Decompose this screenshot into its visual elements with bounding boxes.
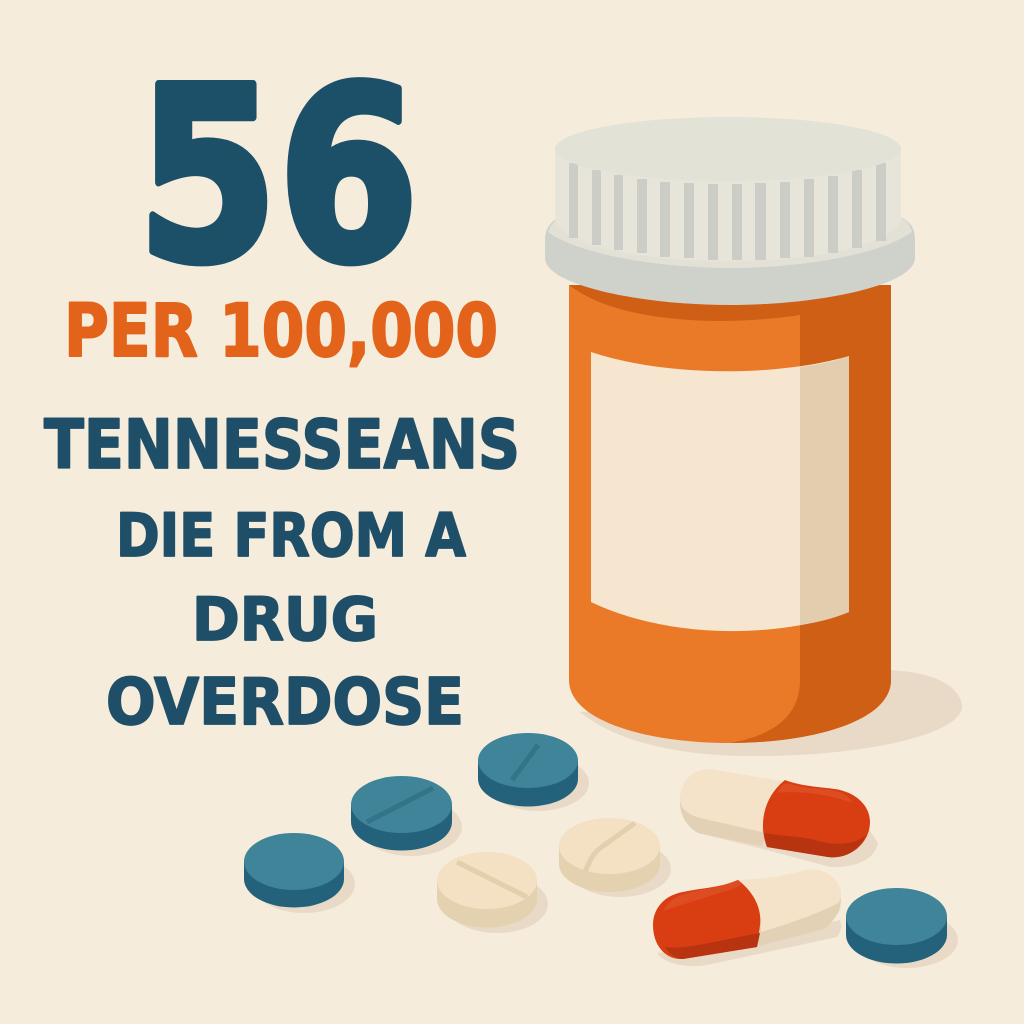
red half <box>653 880 760 959</box>
bottle neck shadow <box>569 285 891 321</box>
subheading: per 100,000: PER 100,000 <box>64 289 498 374</box>
icon: pill bottle <box>545 117 962 756</box>
cap ribbed side <box>555 148 901 261</box>
pill: cream lower <box>437 852 548 933</box>
pill: teal scored <box>351 776 462 856</box>
capsule shadow <box>698 825 878 867</box>
cream half <box>738 870 841 946</box>
capsule: cream and red upper <box>680 769 878 867</box>
bottle body <box>569 285 891 743</box>
label <box>591 352 849 631</box>
bottle shadow <box>580 670 962 756</box>
cap rim <box>545 217 915 305</box>
label shaded side <box>800 356 849 625</box>
pill: teal top <box>478 733 589 811</box>
cap ribs <box>569 163 886 260</box>
capsule shadow <box>657 920 841 966</box>
pill: cream upper <box>559 818 671 897</box>
text block: statement: OVERDOSE <box>106 666 464 740</box>
bottle shaded side <box>730 285 891 743</box>
text block: statement: TENNESSEANS <box>44 406 520 485</box>
big number: 56: 56 <box>137 36 419 316</box>
red half <box>763 780 870 857</box>
cap rim top surface <box>548 217 912 268</box>
text block: statement: DIE FROM A <box>116 501 466 571</box>
capsule: red and cream lower <box>653 870 841 966</box>
pill: teal far right <box>846 888 958 968</box>
cap top <box>555 117 901 181</box>
cream half <box>680 769 785 846</box>
text block: statement: DRUG <box>192 585 378 655</box>
pill: teal far left <box>244 833 355 913</box>
text block: statement <box>44 406 520 740</box>
pills <box>244 733 958 968</box>
